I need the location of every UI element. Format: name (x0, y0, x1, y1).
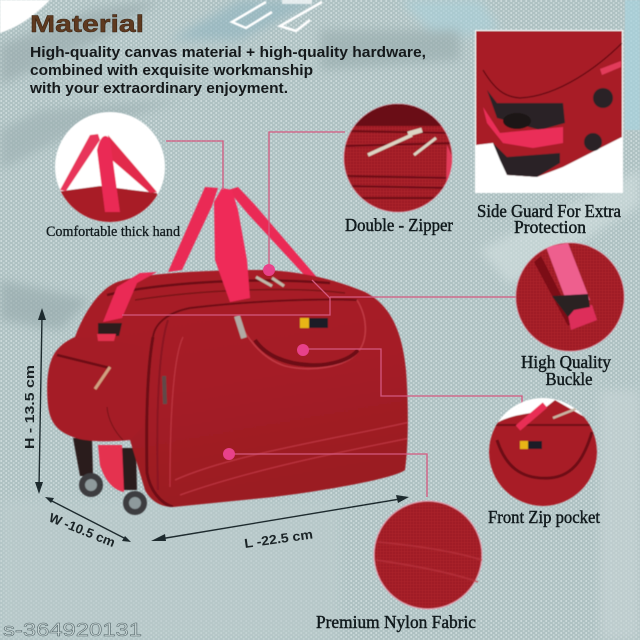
label: high quality buckle: Buckle (546, 369, 592, 389)
front pocket (237, 300, 365, 369)
label: double zipper: Double - Zipper (345, 215, 453, 235)
side pocket zipper pull (95, 367, 110, 389)
top-left white corner (0, 0, 50, 33)
connector lines (122, 132, 522, 497)
circle: double zipper (343, 103, 453, 213)
label: high quality buckle: High Quality (521, 352, 611, 372)
description text: combined with exquisite workmanship (30, 62, 313, 79)
square photo: side guard (475, 30, 623, 193)
side zipper pull (164, 376, 165, 404)
label: premium nylon fabric: Premium Nylon Fabric (316, 612, 476, 632)
circle: front zip pocket (489, 398, 600, 510)
circle: high quality buckle (515, 240, 625, 355)
main zipper pull (237, 316, 244, 338)
top ridge (107, 281, 330, 295)
label: side guard: Protection (514, 217, 586, 237)
label: comfortable thick hand: Comfortable thick hand (46, 224, 180, 240)
front pocket zip band (255, 340, 358, 365)
main bag (47, 187, 410, 512)
front panel seams (153, 299, 357, 337)
centre handle strap (214, 188, 250, 302)
decorative white buckle at top (232, 1, 322, 31)
side pocket (47, 337, 146, 441)
bottom stitching (175, 422, 410, 495)
wheels (73, 438, 144, 512)
title: Material (30, 11, 144, 38)
buckle (98, 323, 122, 336)
description text: with your extraordinary enjoyment. (29, 80, 288, 97)
label: side guard (477, 201, 621, 237)
bag body (75, 270, 408, 507)
circle: premium nylon fabric (374, 501, 482, 609)
handles (168, 187, 332, 295)
dimension arrows (39, 316, 400, 539)
logo (300, 318, 328, 328)
side strap (103, 272, 157, 322)
text: W -10.5 cm (47, 510, 117, 550)
callout dots (223, 264, 309, 460)
label: front zip pocket: Front Zip pocket (488, 507, 600, 527)
dimension labels: H - 13.5 cm (22, 365, 37, 449)
circle: comfortable handle (55, 112, 165, 225)
top zipper pulls (256, 277, 284, 286)
text: L -22.5 cm (243, 527, 314, 551)
description text: High-quality canvas material + high-quality hardware, (30, 44, 426, 61)
watermark id: s-364920131 (3, 620, 142, 640)
label: side guard: Side Guard For Extra (477, 201, 621, 221)
label: high quality buckle (521, 352, 611, 389)
description text (29, 44, 426, 97)
